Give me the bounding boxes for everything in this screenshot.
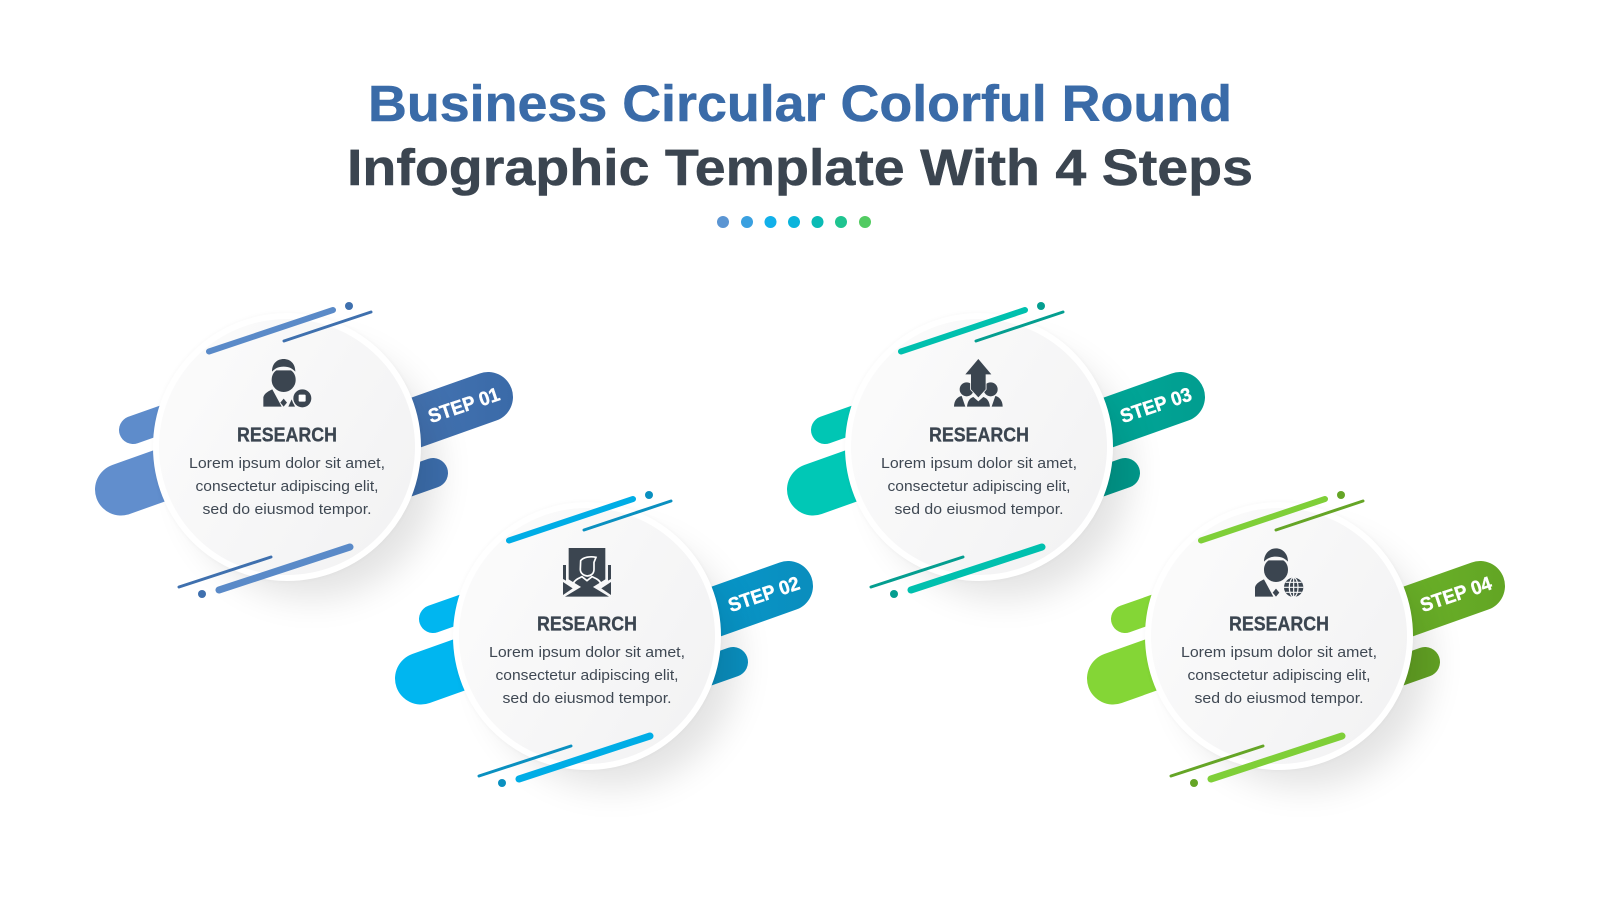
panel: step 03 — [813, 302, 1195, 598]
title — [347, 75, 1253, 196]
panel: step 04: RESEARCH — [1229, 614, 1329, 636]
panel: step 04: consectetur adipiscing elit, — [1188, 667, 1370, 684]
icon: doctor with badge — [263, 359, 313, 409]
panel: step 03: RESEARCH — [929, 424, 1029, 446]
panel: step 02: sed do eiusmod tempor. — [502, 690, 672, 707]
panel: step 04: sed do eiusmod tempor. — [1194, 690, 1364, 707]
panel: step 01: STEP 01 — [426, 384, 503, 428]
panel: step 02 — [421, 491, 803, 787]
icon: team with up arrow — [954, 359, 1003, 407]
panel: step 02: RESEARCH — [537, 614, 637, 636]
panel: step 02: consectetur adipiscing elit, — [496, 667, 678, 684]
panel: step 01: consectetur adipiscing elit, — [196, 478, 378, 495]
panel: step 04: STEP 04 — [1418, 573, 1495, 617]
panel: step 04 — [1113, 491, 1495, 787]
title: Business Circular Colorful Round — [368, 75, 1232, 132]
title: Infographic Template With 4 Steps — [347, 139, 1253, 196]
panel: step 01: Lorem ipsum dolor sit amet, — [189, 455, 385, 472]
icon: envelope with portrait — [563, 548, 611, 597]
panel: step 01: RESEARCH — [237, 424, 337, 446]
panel: step 03: consectetur adipiscing elit, — [888, 478, 1070, 495]
panel: step 01: sed do eiusmod tempor. — [202, 501, 372, 518]
title dots — [717, 216, 871, 228]
icon: person with globe — [1255, 548, 1304, 598]
panel: step 02: STEP 02 — [726, 573, 803, 617]
panel: step 04: Lorem ipsum dolor sit amet, — [1181, 644, 1377, 661]
panel: step 03: STEP 03 — [1118, 384, 1195, 428]
panel: step 03: Lorem ipsum dolor sit amet, — [881, 455, 1077, 472]
panel: step 02: Lorem ipsum dolor sit amet, — [489, 644, 685, 661]
panel: step 01 — [121, 302, 503, 598]
panel: step 03: sed do eiusmod tempor. — [894, 501, 1064, 518]
